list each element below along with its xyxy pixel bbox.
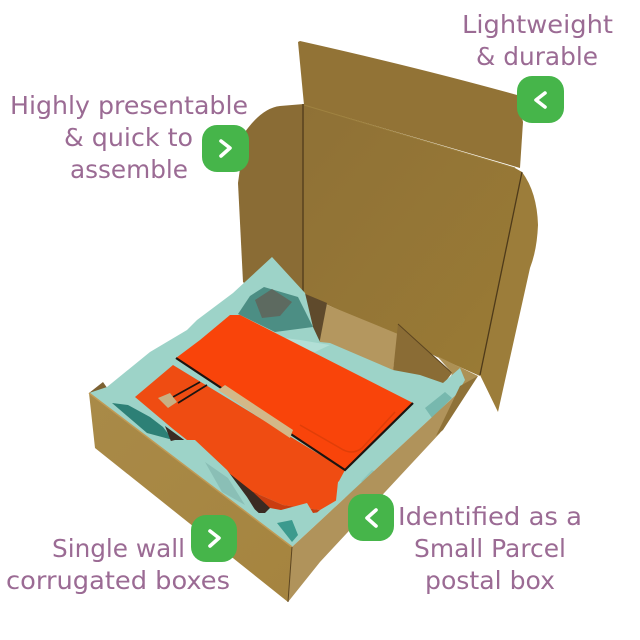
callout: lightweight and durable bbox=[462, 10, 613, 71]
tissue fold upper bbox=[262, 335, 330, 352]
top lid flap bbox=[298, 41, 523, 168]
callout: highly presentable bbox=[10, 91, 248, 184]
callout: highly presentable: assemble bbox=[70, 155, 188, 184]
orange wallet bbox=[135, 315, 413, 516]
back left rim bbox=[89, 382, 110, 400]
callout: small parcel: postal box bbox=[425, 566, 555, 595]
callout: single wall bbox=[6, 534, 230, 595]
front right wall bbox=[288, 388, 463, 602]
front tissue fold bbox=[163, 440, 362, 547]
wallet lower body bbox=[135, 365, 345, 510]
callout: highly presentable: Highly presentable bbox=[10, 91, 248, 120]
callout: small parcel: Small Parcel bbox=[414, 534, 566, 563]
tissue shadow right bbox=[425, 392, 452, 418]
tissue shadow left bbox=[112, 403, 173, 440]
flap stitching bbox=[300, 412, 395, 452]
front tissue shading bbox=[205, 462, 245, 505]
icon: right chevron badge bottom bbox=[191, 515, 237, 562]
callout: lightweight and durable: & durable bbox=[476, 42, 598, 71]
wallet shadow bbox=[165, 426, 272, 516]
callout: highly presentable: & quick to bbox=[64, 123, 193, 152]
callout: small parcel bbox=[398, 502, 582, 595]
tissue shadow upper bbox=[238, 287, 313, 332]
icon: left chevron badge top bbox=[517, 76, 564, 123]
gold strap bbox=[218, 385, 293, 438]
wallet lower edge bbox=[253, 492, 320, 516]
cord tips bbox=[158, 393, 177, 408]
open cardboard box illustration bbox=[89, 41, 538, 602]
icon: left chevron badge bottom bbox=[348, 494, 394, 541]
right wall outer shadow bbox=[436, 376, 478, 436]
inner dark corner bbox=[303, 293, 327, 345]
icon: right chevron badge left bbox=[202, 125, 249, 172]
right side flap bbox=[480, 172, 538, 412]
flap black edge bbox=[176, 358, 413, 470]
callout: single wall: corrugated boxes bbox=[6, 566, 230, 595]
left side flap bbox=[238, 104, 304, 300]
box floor bbox=[318, 304, 398, 372]
lid fold lines bbox=[304, 105, 515, 168]
inner folded tab bbox=[393, 324, 452, 385]
front left wall bbox=[89, 393, 292, 602]
callout: small parcel: Identified as a bbox=[398, 502, 582, 531]
callout: lightweight and durable: Lightweight bbox=[462, 10, 613, 39]
front tissue teal shadow bbox=[277, 520, 298, 542]
tissue paper bbox=[89, 257, 465, 547]
main lid panel bbox=[303, 105, 522, 376]
wallet upper flap bbox=[176, 315, 413, 470]
tissue main sheet bbox=[89, 257, 465, 547]
right inner tan strip bbox=[437, 356, 478, 395]
elastic cords bbox=[173, 382, 207, 403]
callout: single wall: Single wall bbox=[52, 534, 185, 563]
